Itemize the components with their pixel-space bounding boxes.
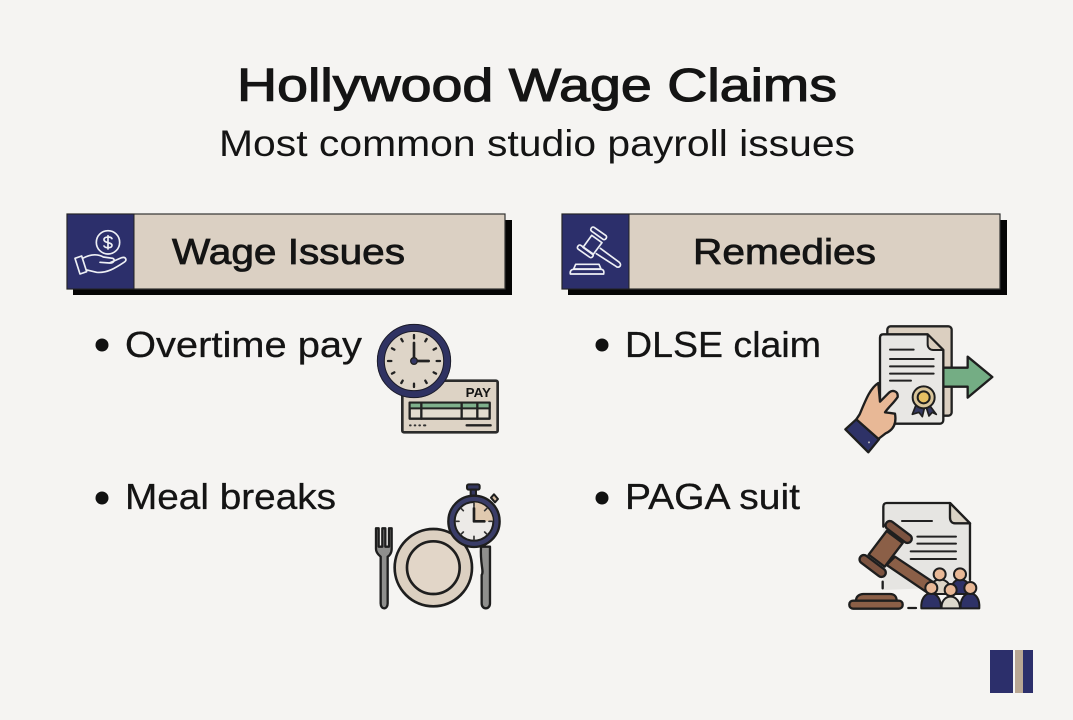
panel: wage issues header	[67, 214, 512, 295]
icon: clock and pay stub	[377, 324, 498, 432]
icon: gavel outline	[570, 226, 621, 274]
list item: paga suit: PAGA suit	[625, 476, 800, 517]
icon: hand holding coin	[75, 231, 126, 274]
list item: overtime pay: Overtime pay	[125, 324, 362, 365]
icon: plate with stopwatch	[376, 484, 500, 608]
heading: wage issues: Wage Issues	[172, 231, 405, 272]
list item: dlse claim: DLSE claim	[625, 324, 821, 365]
icon: gavel, document and group of people	[849, 503, 979, 609]
icon: document with arrow and hand	[845, 326, 992, 452]
heading: remedies: Remedies	[693, 231, 876, 272]
panel: remedies header	[562, 214, 1007, 295]
title: Hollywood Wage Claims	[237, 59, 837, 111]
logo mark	[990, 650, 1033, 693]
icon: clock and pay stub: PAY	[466, 385, 491, 400]
list item: meal breaks: Meal breaks	[125, 476, 336, 517]
subtitle: Most common studio payroll issues	[219, 123, 855, 164]
